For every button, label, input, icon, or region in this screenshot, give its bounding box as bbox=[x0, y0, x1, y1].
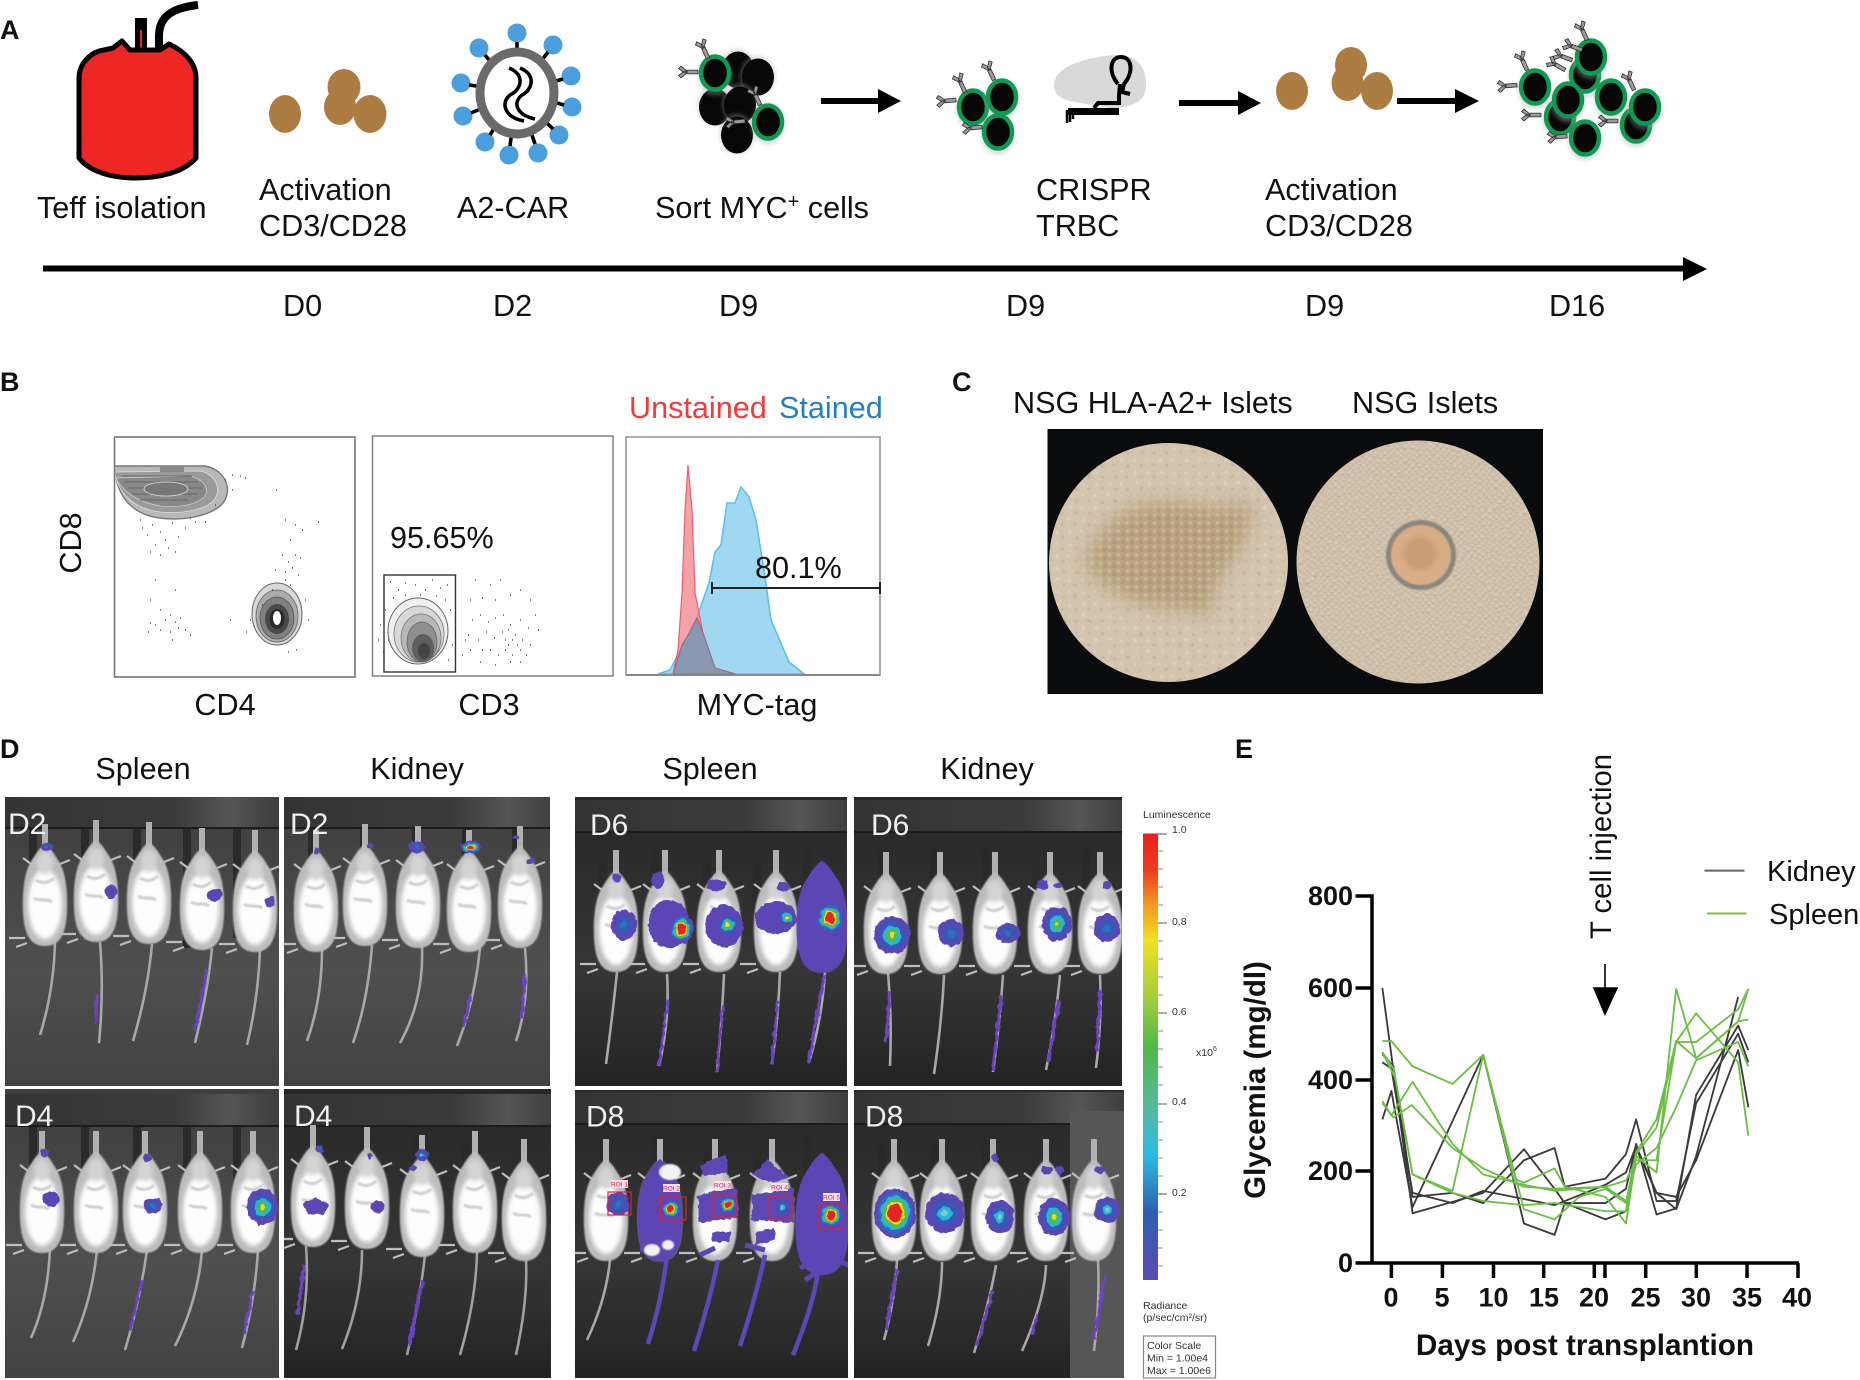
plot: CD4 vs CD8 contour bbox=[114, 437, 355, 677]
y tick labels: 400 bbox=[1308, 1065, 1353, 1095]
colour scale box: Max = 1.00e6 bbox=[1147, 1365, 1211, 1377]
panel letter C: C bbox=[952, 367, 972, 397]
image: D2 spleen bbox=[5, 796, 285, 1086]
image: D4 spleen bbox=[5, 1089, 285, 1378]
image: D4 kidney: D4 bbox=[294, 1100, 332, 1133]
timeline day labels: D9 bbox=[1305, 289, 1344, 323]
colour scale box: Min = 1.00e4 bbox=[1147, 1352, 1208, 1364]
heading: NSG Islets: NSG Islets bbox=[1352, 386, 1498, 420]
x tick labels: 25 bbox=[1630, 1282, 1661, 1312]
icon: blood bag bbox=[79, 5, 198, 178]
rotated text: T cell injection: T cell injection bbox=[1585, 754, 1618, 939]
value 80.1%: 80.1% bbox=[755, 551, 842, 585]
image: D6 spleen bbox=[575, 797, 855, 1086]
image: D2 kidney bbox=[280, 796, 564, 1086]
x tick labels: 15 bbox=[1529, 1282, 1559, 1312]
timeline day labels: D0 bbox=[283, 289, 322, 323]
y tick labels: 600 bbox=[1308, 973, 1353, 1003]
timeline arrow bbox=[43, 257, 1707, 281]
image: D8 kidney: D8 bbox=[865, 1100, 903, 1134]
image: D8 kidney bbox=[854, 1090, 1134, 1378]
x tick labels: 20 bbox=[1579, 1282, 1609, 1312]
image: D4 spleen: D4 bbox=[15, 1100, 53, 1133]
luminescence colour scale: (p/sec/cm²/sr) bbox=[1143, 1312, 1207, 1324]
value 95.65%: 95.65% bbox=[390, 521, 494, 555]
icon: A2-CAR lentivirus bbox=[452, 24, 582, 164]
y axis title: Glycemia (mg/dl) bbox=[1239, 961, 1272, 1199]
y tick labels: 200 bbox=[1308, 1156, 1353, 1186]
icon: sort MYC+ cell cluster bbox=[678, 38, 785, 154]
text: CRISPR TRBC: CRISPR bbox=[1036, 173, 1152, 207]
text: Teff isolation: Teff isolation bbox=[37, 191, 207, 225]
panel C: islet micrographs bbox=[952, 367, 1544, 694]
timeline day labels bbox=[283, 289, 1605, 323]
legend: Unstained Stained: Stained bbox=[779, 391, 883, 425]
kidney group lines bbox=[1382, 988, 1748, 1235]
colour scale box bbox=[1144, 1336, 1216, 1378]
legend: Spleen bbox=[1769, 899, 1859, 931]
luminescence colour scale: 1.0 bbox=[1172, 824, 1187, 836]
panel A: protocol timeline bbox=[0, 5, 1707, 323]
image: D8 spleen with ROIs: ROI 4 bbox=[771, 1184, 788, 1192]
icon: expanded CAR T cells bbox=[1497, 20, 1662, 160]
luminescence colour scale: 6 bbox=[1213, 1046, 1217, 1053]
text: CRISPR TRBC bbox=[1036, 173, 1152, 243]
timeline day labels: D9 bbox=[719, 289, 758, 323]
icon: CRISPR Cas9 with guide RNA bbox=[1054, 55, 1146, 123]
axis label MYC-tag: MYC-tag bbox=[697, 688, 817, 722]
axes and ticks bbox=[1356, 896, 1799, 1278]
timeline day labels: D16 bbox=[1549, 289, 1605, 323]
x tick labels: 40 bbox=[1782, 1282, 1812, 1312]
right well: intact islet bbox=[1292, 436, 1544, 688]
legend: Unstained Stained bbox=[629, 391, 883, 425]
image: D8 spleen with ROIs: ROI 3 bbox=[714, 1182, 731, 1190]
image: D6 kidney bbox=[850, 797, 1134, 1086]
panel letter A: A bbox=[0, 15, 20, 45]
text: Activation CD3/CD28: Activation bbox=[1265, 173, 1398, 207]
panel E: glycemia line chart bbox=[1235, 734, 1859, 1362]
micrograph pair bbox=[1045, 429, 1544, 694]
column heading Spleen: Spleen bbox=[662, 752, 758, 786]
x tick labels: 35 bbox=[1732, 1282, 1762, 1312]
text: Sort MYC+ cells: Sort MYC bbox=[655, 191, 788, 225]
histogram: MYC-tag bbox=[626, 437, 880, 675]
legend: Unstained Stained: Unstained bbox=[629, 391, 767, 425]
image: D6 spleen: D6 bbox=[590, 809, 628, 842]
luminescence colour scale: Luminescence bbox=[1143, 809, 1211, 821]
image: D4 kidney bbox=[277, 1089, 564, 1378]
column heading Kidney: Kidney bbox=[940, 752, 1034, 786]
text: Sort MYC+ cells: cells bbox=[799, 191, 869, 225]
arrow bbox=[821, 89, 901, 113]
arrow bbox=[1397, 89, 1479, 113]
column heading Kidney: Kidney bbox=[370, 752, 464, 786]
text: Sort MYC+ cells: + bbox=[788, 191, 799, 213]
y tick labels: 800 bbox=[1308, 881, 1353, 911]
image: D2 spleen: D2 bbox=[8, 808, 46, 841]
column heading Spleen: Spleen bbox=[95, 752, 191, 786]
image: D2 kidney: D2 bbox=[290, 808, 328, 841]
timeline day labels: D2 bbox=[493, 289, 532, 323]
arrow: injection time bbox=[1594, 964, 1617, 1014]
icon: activation beads bbox=[1276, 47, 1393, 110]
image: D8 spleen with ROIs: ROI 5 bbox=[823, 1194, 840, 1202]
image: D8 spleen with ROIs: ROI 1 bbox=[611, 1182, 628, 1188]
image: D8 spleen with ROIs: ROI 2 bbox=[663, 1186, 680, 1192]
text: Activation CD3/CD28 bbox=[259, 173, 407, 243]
y tick labels: 0 bbox=[1338, 1248, 1353, 1278]
timeline day labels: D9 bbox=[1006, 289, 1045, 323]
text: Activation CD3/CD28: CD3/CD28 bbox=[1265, 209, 1413, 243]
plot: CD3 contour with gate bbox=[372, 436, 613, 676]
axis label CD8: CD8 bbox=[54, 512, 88, 574]
luminescence colour scale: x10 bbox=[1196, 1047, 1213, 1059]
luminescence colour scale: 0.6 bbox=[1172, 1006, 1187, 1018]
icon: activation beads bbox=[269, 69, 386, 133]
icon: transduced cells bbox=[936, 60, 1019, 154]
legend bbox=[1704, 856, 1859, 931]
legend: Kidney bbox=[1767, 856, 1856, 888]
image: D8 spleen with ROIs bbox=[570, 1090, 855, 1378]
panel B: flow cytometry bbox=[0, 367, 883, 722]
x tick labels: 0 bbox=[1383, 1282, 1399, 1312]
left well: dispersed islet bbox=[1045, 440, 1293, 685]
heading: NSG HLA-A2+ Islets: NSG HLA-A2+ Islets bbox=[1013, 386, 1293, 420]
text: Activation CD3/CD28 bbox=[1265, 173, 1413, 243]
text: Activation CD3/CD28: CD3/CD28 bbox=[259, 209, 407, 243]
luminescence colour scale: 0.2 bbox=[1172, 1187, 1187, 1199]
panel letter D: D bbox=[0, 734, 20, 764]
luminescence colour scale bbox=[1143, 809, 1217, 1324]
panel letter E: E bbox=[1235, 734, 1253, 764]
axis label CD4: CD4 bbox=[194, 688, 256, 722]
text: Activation CD3/CD28: Activation bbox=[259, 173, 392, 207]
luminescence colour scale: 0.8 bbox=[1172, 916, 1187, 928]
arrow bbox=[1179, 91, 1261, 115]
text: CRISPR TRBC: TRBC bbox=[1036, 209, 1119, 243]
y tick labels bbox=[1308, 881, 1353, 1278]
luminescence colour scale: Radiance bbox=[1143, 1300, 1188, 1312]
x tick labels bbox=[1383, 1282, 1812, 1312]
text: A2-CAR: A2-CAR bbox=[457, 191, 569, 225]
x tick labels: 30 bbox=[1681, 1282, 1711, 1312]
panel letter B: B bbox=[0, 367, 20, 397]
x tick labels: 10 bbox=[1478, 1282, 1509, 1312]
x axis title: Days post transplantion bbox=[1416, 1329, 1754, 1362]
spleen group lines bbox=[1382, 989, 1748, 1223]
colour scale box: Color Scale bbox=[1147, 1340, 1201, 1352]
panel D: bioluminescence imaging bbox=[0, 734, 1217, 1378]
image: D8 spleen with ROIs: D8 bbox=[586, 1100, 624, 1134]
luminescence colour scale: 0.4 bbox=[1172, 1096, 1187, 1108]
x tick labels: 5 bbox=[1434, 1282, 1450, 1312]
image: D6 kidney: D6 bbox=[871, 809, 909, 842]
axis label CD3: CD3 bbox=[458, 688, 520, 722]
